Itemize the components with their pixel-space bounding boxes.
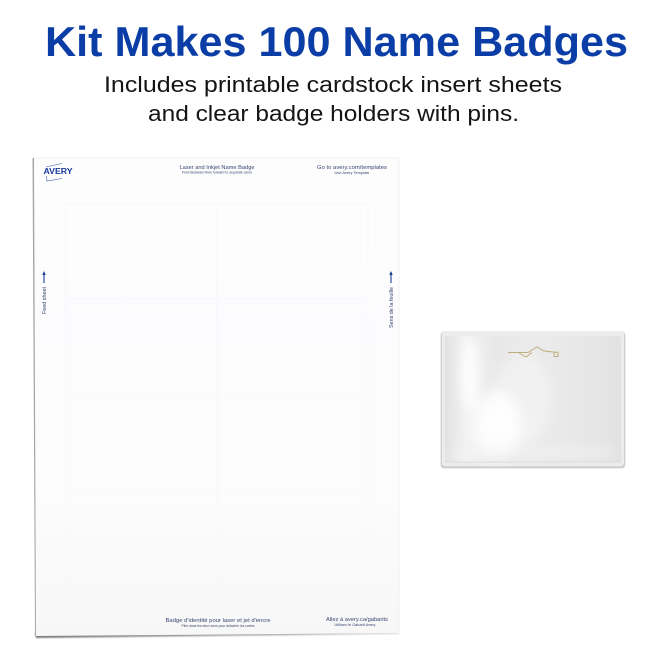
icon: gold pin [508, 347, 558, 357]
arrow: sens de la feuille: Sens de la feuille [389, 287, 395, 328]
panel: insert sheet [32, 158, 400, 638]
title: Kit Makes 100 Name Badges [45, 18, 628, 65]
top center label: Laser and Inkjet Name Badge [180, 165, 254, 171]
arrow: feed sheet [42, 271, 48, 314]
subtitle [104, 72, 562, 126]
bottom right label: Utilisez le Gabarit Avery [334, 623, 376, 627]
bottom center label: Plier dans les deux sens pour détacher les cartes [182, 624, 255, 628]
top right label: Use Avery Template [334, 171, 370, 175]
subtitle: and clear badge holders with pins. [148, 101, 519, 126]
bottom right label [326, 617, 388, 627]
top center label [180, 165, 254, 174]
subtitle: Includes printable cardstock insert sheets [104, 72, 562, 97]
top center label: Fold backward then forward to separate cards [182, 170, 252, 174]
icon: Avery logo: AVERY [44, 167, 73, 176]
top right label: Go to avery.com/templates [317, 165, 387, 171]
bottom center label: Badge d'identité pour laser et jet d'encre [166, 618, 270, 624]
arrow: feed sheet: Feed sheet [42, 287, 48, 314]
icon: Avery logo [44, 164, 73, 181]
top right label [317, 165, 387, 175]
badge grid lines [66, 204, 368, 589]
bottom right label: Allez à avery.ca/gabarits [326, 617, 388, 623]
bottom center label [166, 618, 270, 628]
plastic reflections [452, 339, 612, 467]
panel: clear badge holder [441, 331, 625, 468]
